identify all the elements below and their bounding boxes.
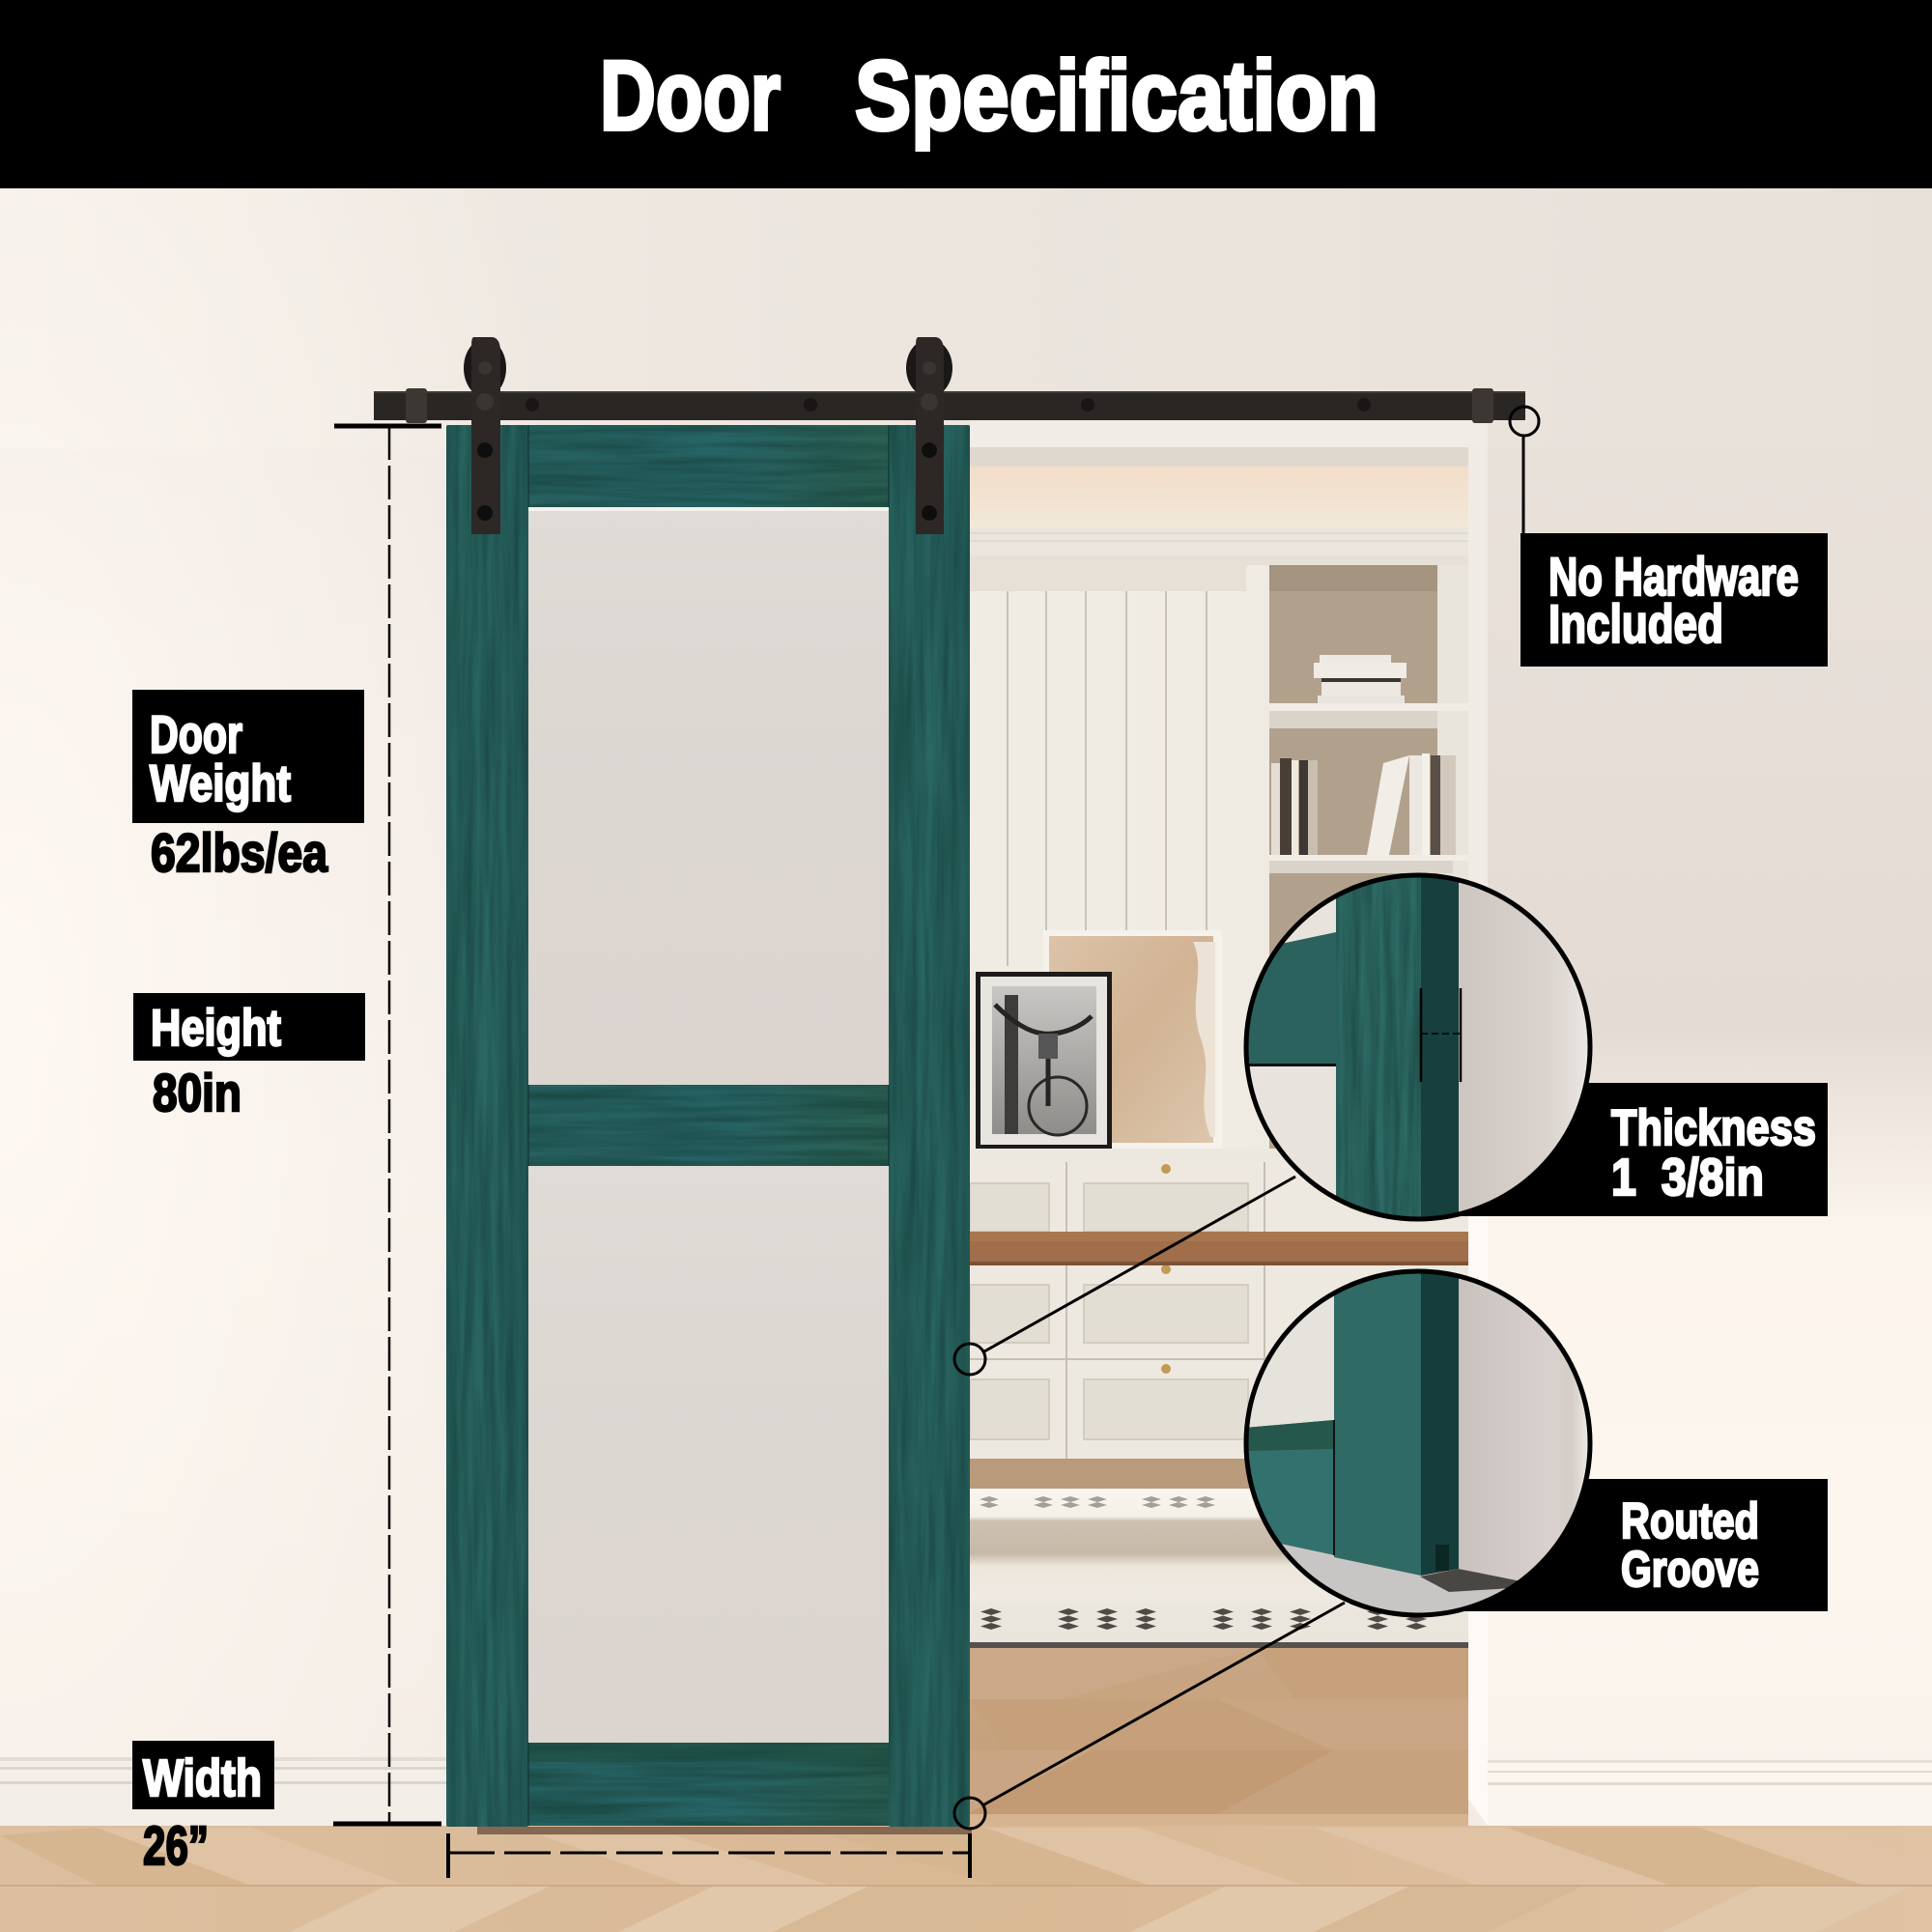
cabinets bbox=[970, 1149, 1468, 1459]
header bar bbox=[0, 0, 1932, 188]
barn door track bbox=[374, 388, 1525, 423]
title bbox=[600, 41, 1378, 151]
label: Door Weight: Weight bbox=[150, 755, 291, 812]
value: 26 inches: 26” bbox=[143, 1815, 209, 1877]
title: Door bbox=[600, 41, 781, 151]
label: Routed Groove bbox=[1418, 1479, 1828, 1611]
label: No Hardware Included bbox=[1520, 533, 1828, 667]
width dimension line bbox=[448, 1833, 970, 1878]
door bottom rail bbox=[528, 1743, 889, 1826]
door bbox=[446, 425, 970, 1827]
track bolts bbox=[526, 398, 1371, 412]
baseboard left bbox=[0, 1757, 446, 1826]
books: stack bbox=[1314, 655, 1406, 703]
door stile right bbox=[889, 425, 970, 1827]
wainscot panels bbox=[970, 591, 1250, 1171]
door frosted panels bbox=[527, 507, 889, 1743]
label: Thickness: Thickness bbox=[1611, 1100, 1816, 1156]
doorway trim bbox=[970, 419, 1488, 1826]
detail circle: thickness bbox=[1244, 873, 1592, 1221]
leader: thickness marker bbox=[954, 1177, 1295, 1375]
walnut shelf bbox=[970, 1232, 1468, 1265]
door stile left bbox=[446, 425, 528, 1827]
height dimension line bbox=[333, 426, 441, 1824]
door middle rail bbox=[528, 1085, 889, 1166]
black photo frame bbox=[976, 972, 1112, 1150]
label: Thickness: 1 3/8in bbox=[1611, 1149, 1764, 1207]
label: No Hardware Included: No Hardware bbox=[1548, 546, 1799, 607]
stop left bbox=[406, 388, 427, 423]
room interior bbox=[966, 447, 1468, 1826]
beige art frame bbox=[1043, 930, 1222, 1149]
value: 80in: 80in bbox=[153, 1063, 242, 1122]
title: Specification bbox=[855, 41, 1378, 151]
roller strap right bbox=[906, 337, 952, 534]
label: Width: Width bbox=[143, 1749, 262, 1807]
label: Door Weight: Door bbox=[150, 704, 242, 764]
bookshelf bbox=[1246, 565, 1468, 1164]
rug and floor bbox=[966, 1459, 1468, 1826]
stop right bbox=[1472, 388, 1493, 423]
label: Height bbox=[133, 993, 365, 1061]
roller strap left bbox=[464, 337, 506, 534]
value: 62lbs/ea: 62lbs/ea bbox=[151, 822, 328, 883]
leader: groove marker bbox=[954, 1603, 1345, 1829]
label: Routed Groove: Routed bbox=[1621, 1493, 1759, 1549]
baseboard right bbox=[1488, 1760, 1932, 1826]
callout: hardware marker and leader bbox=[1510, 407, 1539, 534]
label: Door Weight bbox=[132, 690, 364, 823]
detail circle: routed groove bbox=[1244, 1269, 1592, 1623]
door top rail bbox=[528, 425, 889, 507]
label: Height: Height bbox=[151, 1000, 281, 1057]
label: Routed Groove: Groove bbox=[1621, 1542, 1759, 1598]
label: Thickness bbox=[1418, 1083, 1828, 1216]
label: No Hardware Included: Included bbox=[1548, 593, 1723, 654]
floor bbox=[0, 1826, 1932, 1932]
books: upright bbox=[1271, 753, 1456, 855]
